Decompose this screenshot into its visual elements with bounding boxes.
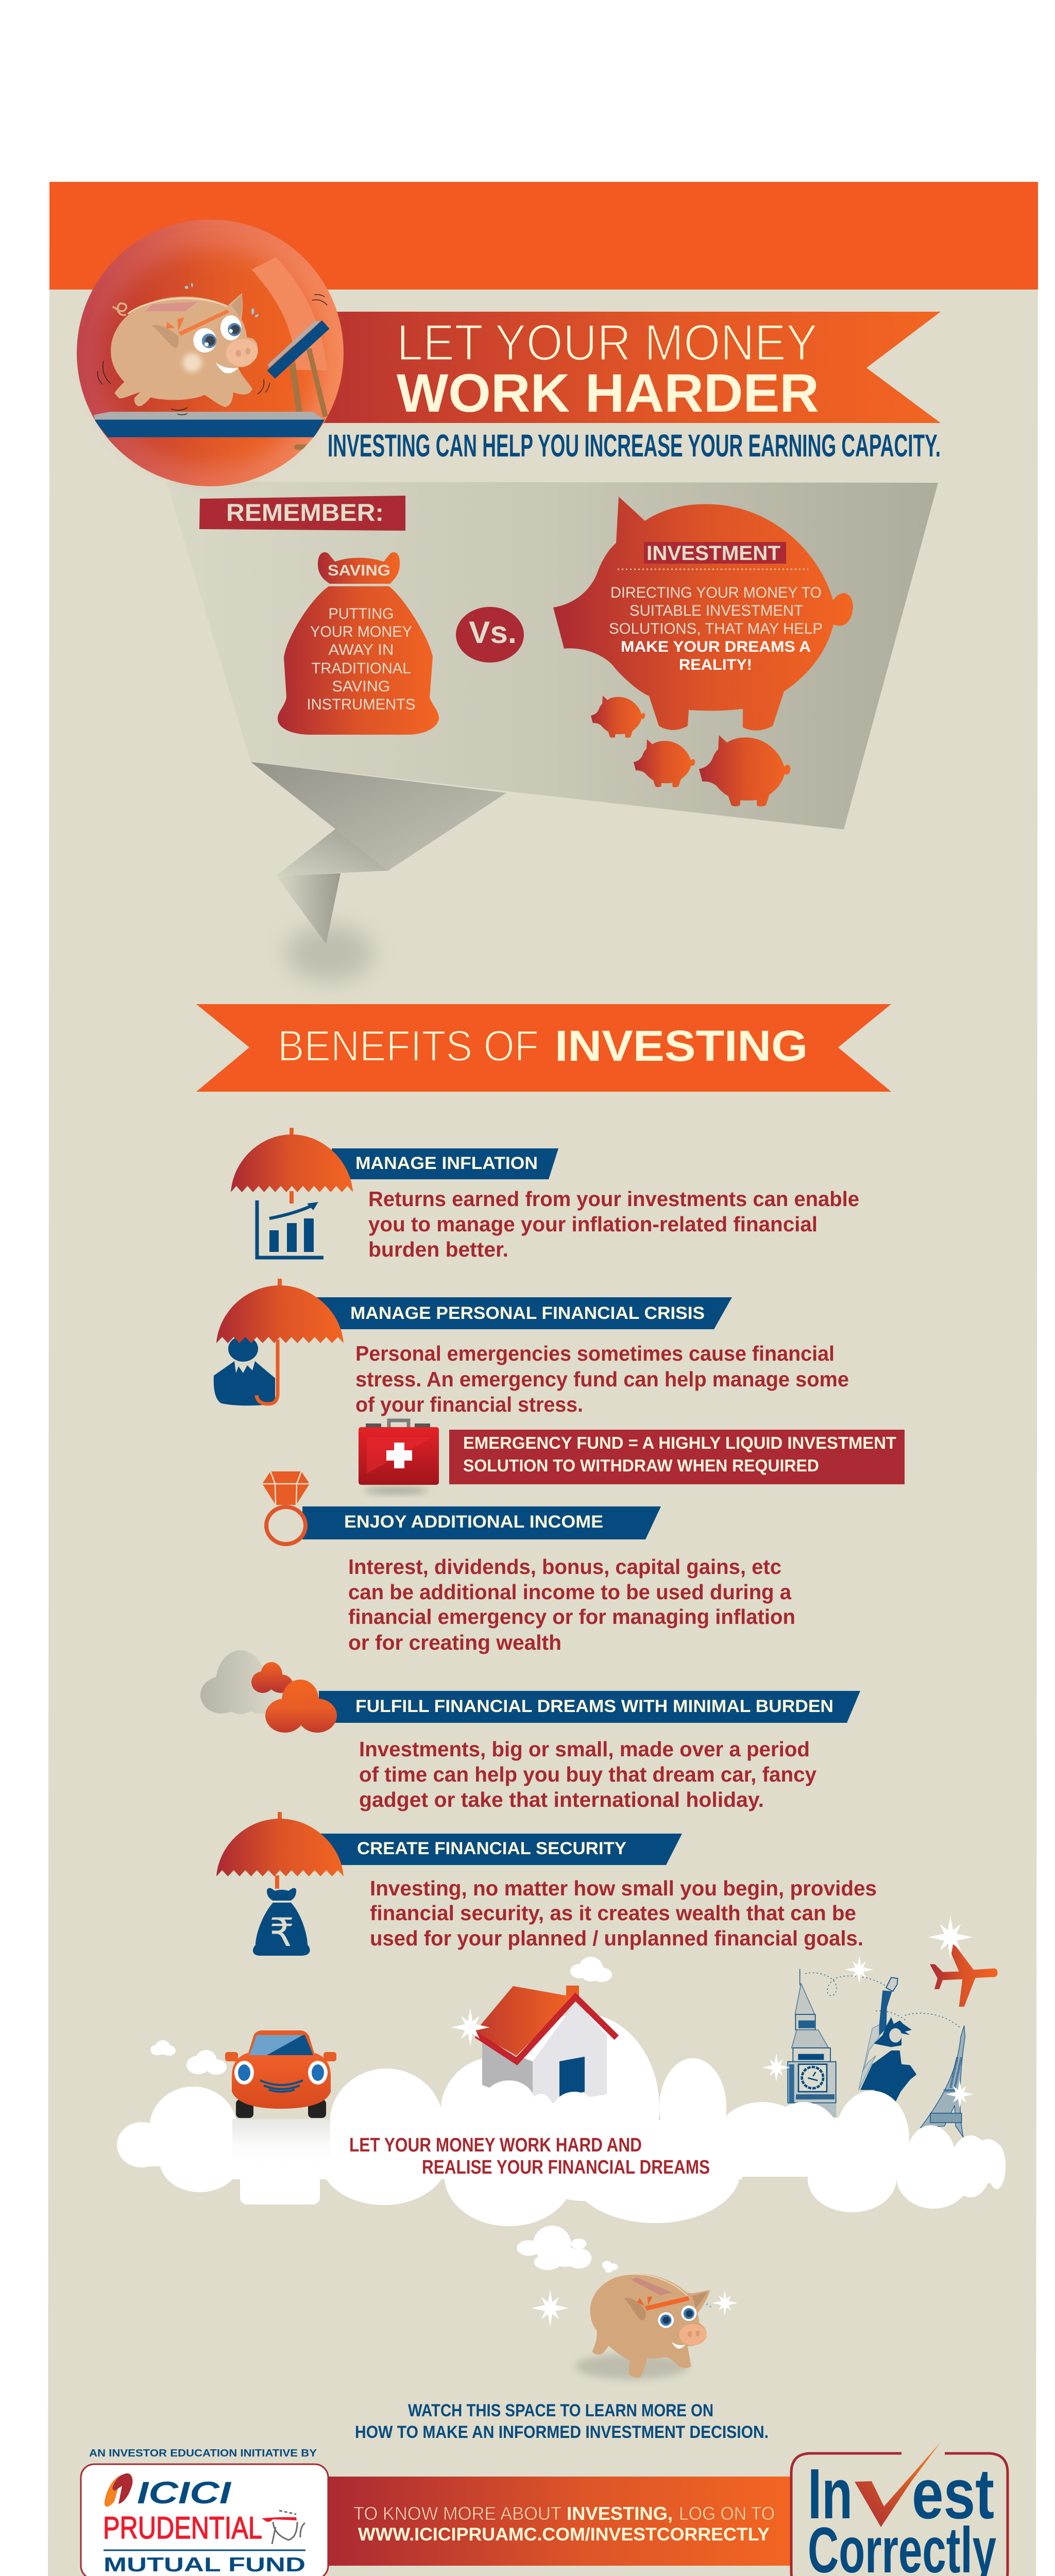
saving description: TRADITIONAL <box>311 660 411 677</box>
text: Investments, big or small, made over a period <box>359 1737 810 1761</box>
text <box>348 1555 795 1654</box>
remember panel <box>166 482 938 981</box>
text <box>355 1342 849 1416</box>
versus badge: Vs. <box>469 615 517 650</box>
small pigs <box>591 696 790 806</box>
title ribbon <box>309 312 941 423</box>
investment description: SUITABLE INVESTMENT <box>629 602 803 619</box>
banner: MANAGE PERSONAL FINANCIAL CRISIS <box>350 1303 705 1323</box>
icon: airplane <box>930 1944 998 2007</box>
text: you to manage your inflation-related financial <box>368 1212 818 1236</box>
icon: eiffel tower <box>921 2026 965 2137</box>
text: stress. An emergency fund can help manage some <box>355 1367 849 1391</box>
emergency fund callout: SOLUTION TO WITHDRAW WHEN REQUIRED <box>463 1456 819 1475</box>
emergency fund callout <box>449 1430 905 1484</box>
thinking piggy <box>517 2226 711 2379</box>
icici i mark <box>105 2473 132 2507</box>
text: or for creating wealth <box>348 1631 561 1654</box>
saving description: SAVING <box>332 678 390 695</box>
remember label <box>199 496 405 531</box>
sparkle stars <box>451 1916 974 2327</box>
saving description: AWAY IN <box>329 641 394 658</box>
benefit: manage inflation <box>231 1128 859 1261</box>
investment description: SOLUTIONS, THAT MAY HELP <box>609 620 823 637</box>
banner <box>313 1297 732 1329</box>
watch this space message: HOW TO MAKE AN INFORMED INVESTMENT DECISION. <box>355 2422 769 2442</box>
title line two: WORK HARDER <box>397 363 819 423</box>
header orange bar <box>49 182 1038 290</box>
text: financial security, as it creates wealth that can be <box>370 1901 856 1925</box>
logo: invest correctly <box>791 2442 1008 2576</box>
banner: FULFILL FINANCIAL DREAMS WITH MINIMAL BURDEN <box>355 1697 833 1716</box>
investment description <box>609 584 823 673</box>
saving description <box>307 605 415 713</box>
banner <box>319 1691 860 1723</box>
saving label: SAVING <box>328 562 390 579</box>
logo: icici prudential mutual fund: PRUDENTIAL <box>103 2511 262 2545</box>
prudence head emblem <box>262 2511 305 2544</box>
landmarks <box>788 1969 965 2137</box>
logo: invest correctly: est <box>912 2454 994 2534</box>
investment description: DIRECTING YOUR MONEY TO <box>610 584 822 601</box>
benefits heading: BENEFITS OF <box>278 1022 539 1070</box>
dream caption: LET YOUR MONEY WORK HARD AND <box>349 2134 642 2156</box>
call to action band: INVESTING, <box>567 2503 673 2524</box>
benefits ribbon: INVESTING <box>555 1022 808 1070</box>
title line one: LET YOUR MONEY <box>397 314 818 371</box>
saving description: PUTTING <box>329 605 394 622</box>
remember label: REMEMBER: <box>226 499 384 526</box>
benefit: create financial security <box>216 1812 877 1956</box>
cloud puffs in front of house <box>483 2080 603 2133</box>
speech bubble paper <box>166 482 938 829</box>
benefit: fulfill financial dreams <box>200 1650 860 1811</box>
investment label: INVESTMENT <box>646 542 780 565</box>
icon: umbrella over rupee bag <box>216 1812 344 1956</box>
call to action band <box>328 2477 790 2566</box>
dream caption <box>349 2134 710 2178</box>
text: financial emergency or for managing inflation <box>348 1605 795 1629</box>
small clouds <box>150 1957 612 2075</box>
icon: umbrella over chart <box>231 1128 353 1258</box>
icon: house <box>474 1986 617 2133</box>
text: used for your planned / unplanned financial goals. <box>370 1926 863 1950</box>
icon: big ben <box>788 1969 836 2128</box>
logo: icici prudential mutual fund <box>81 2464 328 2576</box>
icon: diamond ring <box>262 1471 310 1544</box>
investment description: MAKE YOUR DREAMS A <box>621 638 811 655</box>
benefit: manage personal financial crisis <box>214 1279 905 1494</box>
investment pig <box>553 497 853 731</box>
call to action band: TO KNOW MORE ABOUT <box>353 2503 561 2524</box>
speech bubble folded tail <box>251 762 506 981</box>
icon: car <box>225 2030 336 2163</box>
text <box>370 1876 877 1950</box>
banner <box>317 1834 682 1865</box>
text: of your financial stress. <box>355 1393 583 1416</box>
dream caption: REALISE YOUR FINANCIAL DREAMS <box>422 2157 710 2178</box>
icon: statue of liberty <box>859 1977 916 2106</box>
banner <box>302 1506 661 1539</box>
saving bag <box>278 552 439 735</box>
benefit: enjoy additional income <box>262 1471 795 1654</box>
logo: invest correctly: In <box>808 2454 853 2534</box>
investment description: REALITY! <box>679 656 752 673</box>
text <box>368 1187 859 1261</box>
watch this space message <box>355 2401 769 2442</box>
banner: MANAGE INFLATION <box>355 1154 538 1173</box>
text: of time can help you buy that dream car, fancy <box>359 1762 816 1786</box>
banner: CREATE FINANCIAL SECURITY <box>357 1839 626 1858</box>
text: Investing, no matter how small you begin, provides <box>370 1876 877 1900</box>
saving description: INSTRUMENTS <box>307 696 415 713</box>
benefits ribbon <box>196 1004 891 1092</box>
piggy on treadmill bubble <box>77 219 344 486</box>
text: Interest, dividends, bonus, capital gains, etc <box>348 1555 781 1579</box>
emergency fund callout: EMERGENCY FUND = A HIGHLY LIQUID INVESTMENT <box>463 1433 896 1452</box>
banner <box>332 1148 558 1179</box>
text: can be additional income to be used during a <box>348 1580 792 1604</box>
initiative caption: AN INVESTOR EDUCATION INITIATIVE BY <box>89 2448 317 2459</box>
piggy body <box>590 2274 711 2378</box>
text <box>359 1737 816 1811</box>
icon: umbrella over rupee bag: ₹ <box>269 1911 294 1955</box>
logo: icici prudential mutual fund: MUTUAL FUND <box>104 2554 305 2576</box>
icon: person under umbrella <box>214 1279 344 1405</box>
call to action band: WWW.ICICIPRUAMC.COM/INVESTCORRECTLY <box>358 2524 770 2545</box>
banner: ENJOY ADDITIONAL INCOME <box>344 1512 603 1532</box>
treadmill <box>94 257 330 450</box>
running piggy <box>98 283 327 415</box>
thought clouds <box>517 2226 618 2273</box>
call to action band: LOG ON TO <box>679 2503 775 2524</box>
versus badge <box>456 607 524 663</box>
logo: icici prudential mutual fund: ICICI <box>137 2476 232 2510</box>
watch this space message: WATCH THIS SPACE TO LEARN MORE ON <box>408 2401 713 2420</box>
text: Returns earned from your investments can enable <box>368 1187 859 1211</box>
flight path dots <box>805 1973 961 2028</box>
text: gadget or take that international holiday. <box>359 1788 764 1811</box>
text: Personal emergencies sometimes cause financial <box>355 1342 835 1365</box>
big white cloud <box>117 2013 1006 2226</box>
text: burden better. <box>368 1238 508 1261</box>
dream scene <box>117 1916 1006 2379</box>
saving description: YOUR MONEY <box>310 623 412 640</box>
icon: clouds <box>200 1650 337 1733</box>
icon: first aid kit <box>359 1420 439 1494</box>
